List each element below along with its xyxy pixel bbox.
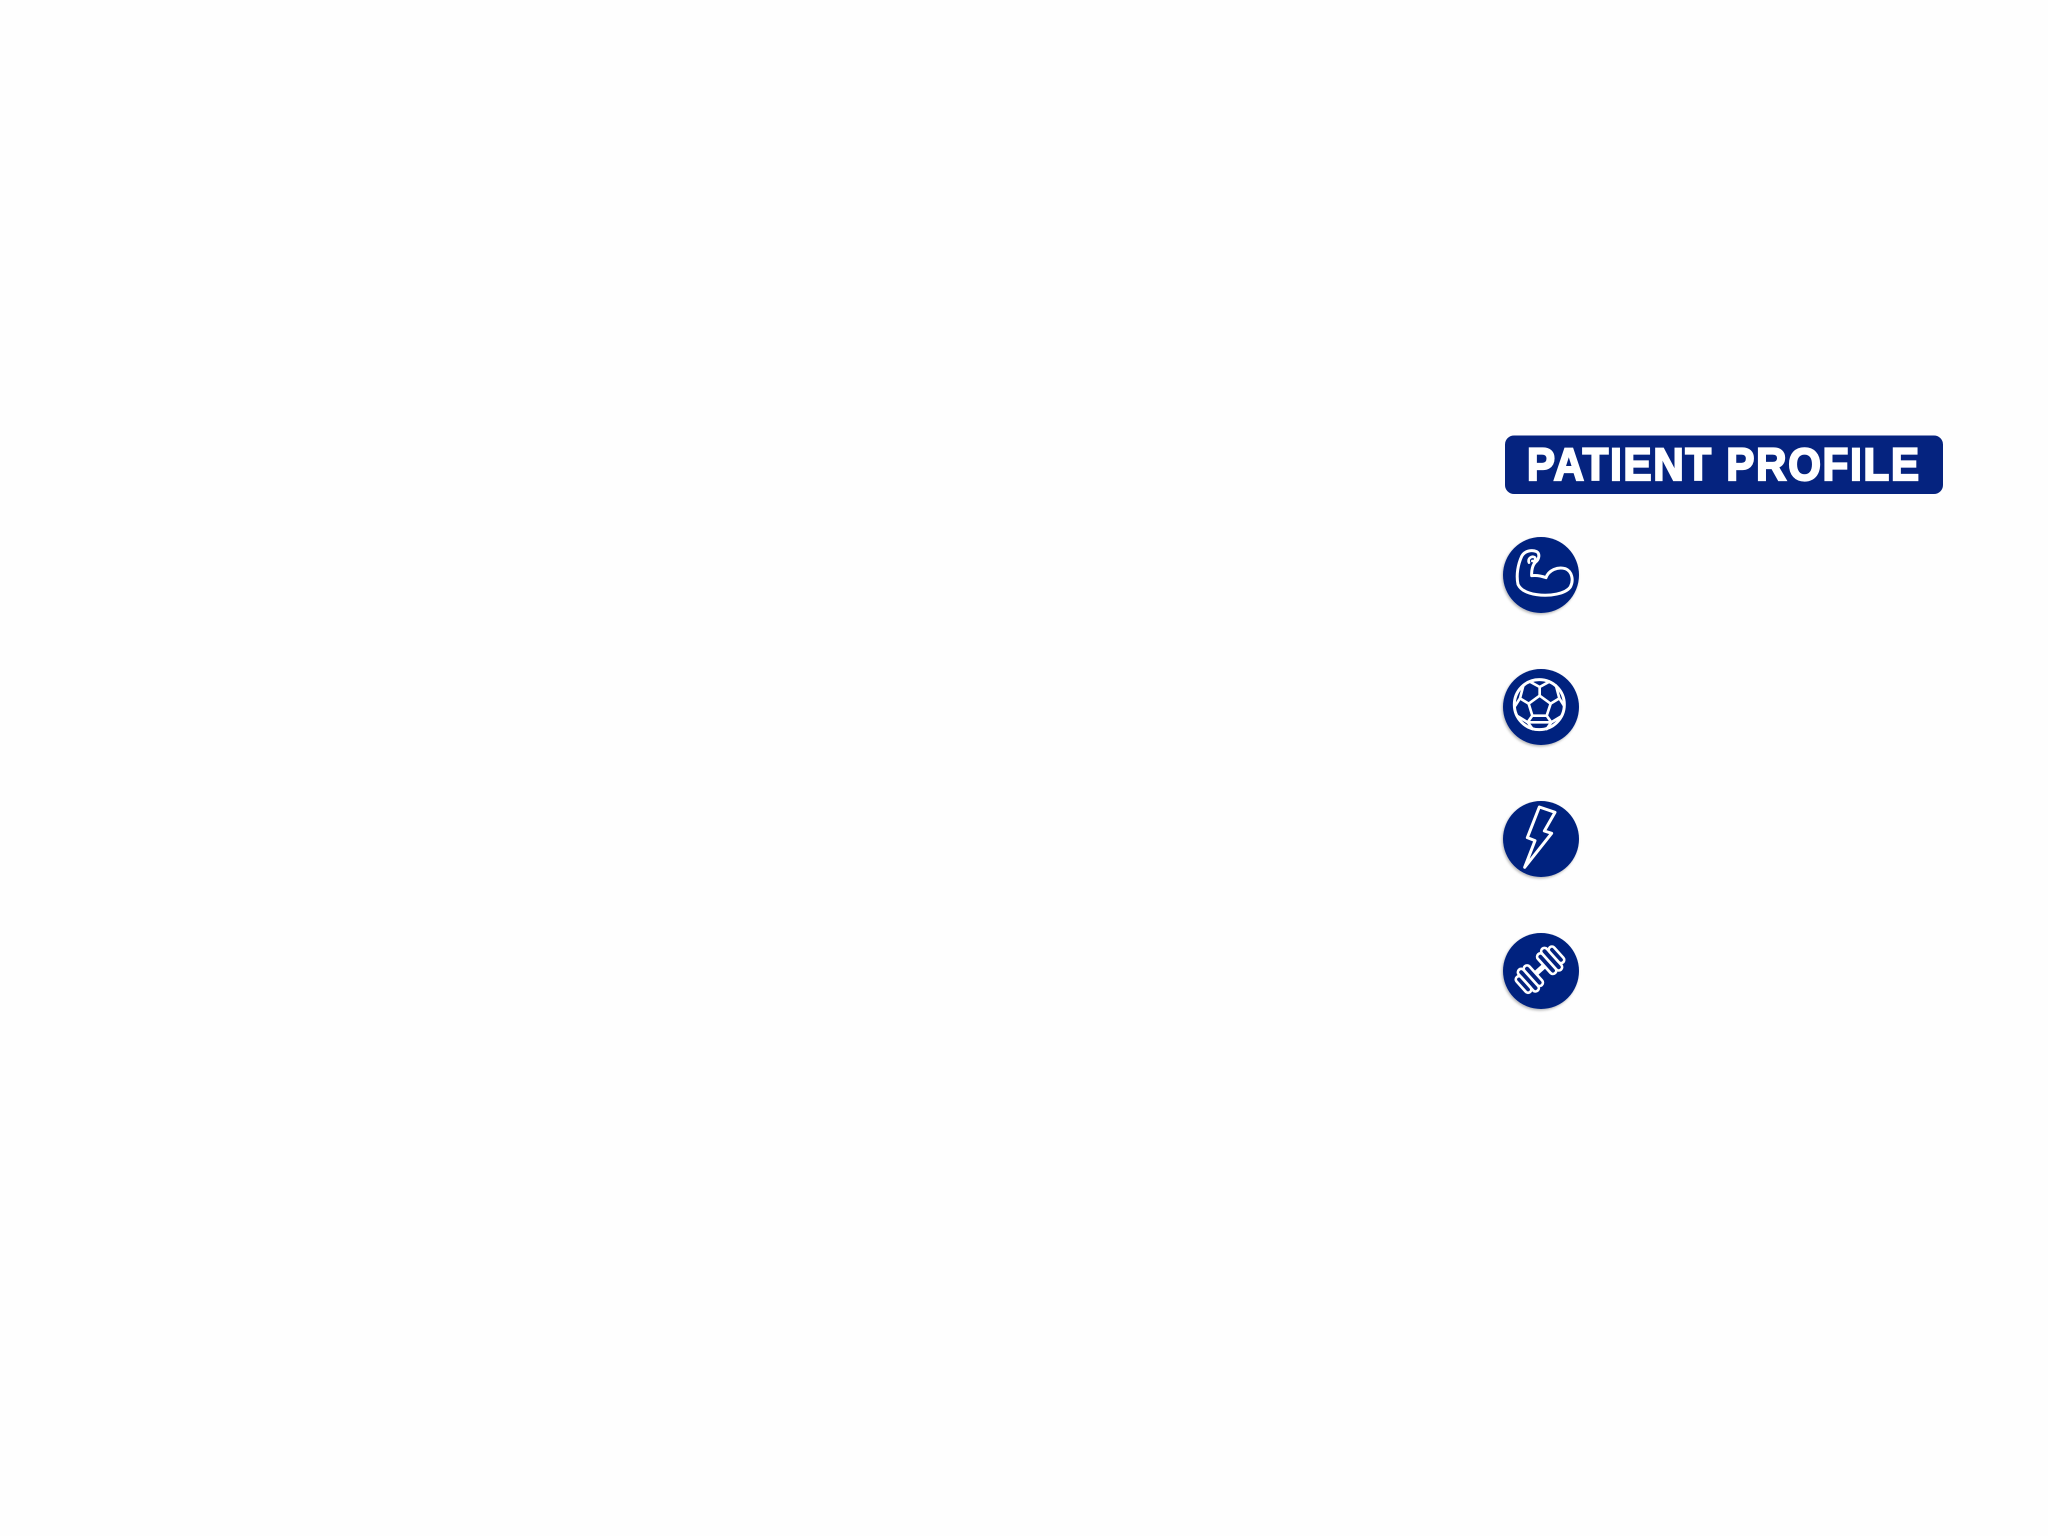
panel: patient profile — [1503, 436, 1943, 1009]
icon: lightning bolt — [1503, 801, 1579, 877]
icon: dumbbell — [1503, 933, 1579, 1009]
icon: soccer ball — [1503, 669, 1579, 745]
icon: flexed arm — [1503, 537, 1579, 613]
heading: patient profile banner: PATIENT PROFILE — [1527, 440, 1919, 490]
